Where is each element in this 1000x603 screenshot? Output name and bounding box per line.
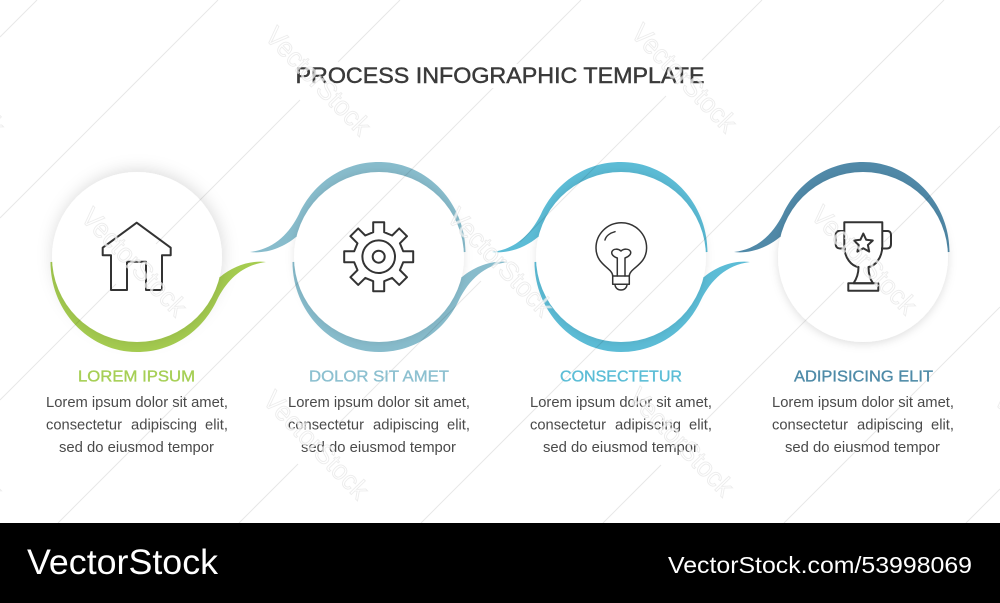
heading: DOLOR SIT AMET bbox=[309, 368, 449, 386]
body: adipiscing bbox=[857, 418, 923, 434]
white circle 4 bbox=[778, 172, 948, 342]
footer logo: VectorStock bbox=[27, 543, 219, 582]
white circle 2 bbox=[294, 172, 464, 342]
crescent: dark blue top bbox=[734, 162, 950, 257]
body: consectetur bbox=[288, 418, 364, 434]
step 2: gear circle bbox=[250, 162, 508, 352]
title: PROCESS INFOGRAPHIC TEMPLATE bbox=[296, 63, 704, 88]
body: adipiscing bbox=[131, 418, 197, 434]
heading: CONSECTETUR bbox=[560, 368, 682, 386]
body: elit, bbox=[689, 418, 712, 434]
body: adipiscing bbox=[615, 418, 681, 434]
icon: gear bbox=[344, 222, 413, 291]
body: sed do eiusmod tempor bbox=[59, 440, 214, 456]
text block: consectetur bbox=[530, 368, 712, 456]
crescent: green bbox=[50, 257, 266, 352]
text block: adipisicing elit bbox=[772, 368, 954, 456]
body: Lorem ipsum dolor sit amet, bbox=[288, 395, 470, 411]
white circle 3 bbox=[536, 172, 706, 342]
body: elit, bbox=[447, 418, 470, 434]
body: Lorem ipsum dolor sit amet, bbox=[772, 395, 954, 411]
watermark stamps: VectorStock bbox=[441, 202, 559, 322]
step 4: trophy circle bbox=[734, 162, 950, 342]
body: sed do eiusmod tempor bbox=[785, 440, 940, 456]
text block: dolor sit amet bbox=[288, 368, 470, 456]
watermark stamps: VectorStock bbox=[257, 385, 375, 505]
footer url: VectorStock.com/53998069 bbox=[668, 552, 972, 578]
step 3: bulb circle bbox=[492, 162, 750, 352]
body: sed do eiusmod tempor bbox=[543, 440, 698, 456]
footer bar bbox=[0, 523, 1000, 603]
body: consectetur bbox=[46, 418, 122, 434]
body bbox=[288, 395, 470, 456]
white circle 1 bbox=[52, 172, 222, 342]
body: Lorem ipsum dolor sit amet, bbox=[530, 395, 712, 411]
watermark stamps: VectorStock bbox=[75, 202, 193, 322]
watermark stamps: VectorStock bbox=[625, 18, 743, 138]
icon: house bbox=[103, 223, 171, 290]
body: sed do eiusmod tempor bbox=[301, 440, 456, 456]
body: adipiscing bbox=[373, 418, 439, 434]
body: consectetur bbox=[530, 418, 606, 434]
body bbox=[772, 395, 954, 456]
heading: ADIPISICING ELIT bbox=[794, 368, 933, 386]
body: consectetur bbox=[772, 418, 848, 434]
crescent: teal bottom bbox=[292, 257, 508, 352]
crescent: teal top bbox=[250, 162, 466, 257]
crescent: blue top bbox=[492, 162, 708, 257]
body: Lorem ipsum dolor sit amet, bbox=[46, 395, 228, 411]
body: elit, bbox=[931, 418, 954, 434]
body: elit, bbox=[205, 418, 228, 434]
body bbox=[46, 395, 228, 456]
icon: light bulb bbox=[596, 223, 647, 290]
step 1: home circle bbox=[50, 172, 266, 352]
icon: trophy bbox=[836, 222, 891, 291]
watermark stamps: VectorStock bbox=[259, 21, 377, 141]
watermark stamps: VectorStock bbox=[622, 382, 740, 502]
watermark stamps: VectorStock bbox=[805, 200, 923, 320]
text block: lorem ipsum bbox=[46, 368, 228, 456]
body bbox=[530, 395, 712, 456]
heading: LOREM IPSUM bbox=[78, 368, 195, 386]
crescent: blue bottom bbox=[534, 257, 750, 352]
